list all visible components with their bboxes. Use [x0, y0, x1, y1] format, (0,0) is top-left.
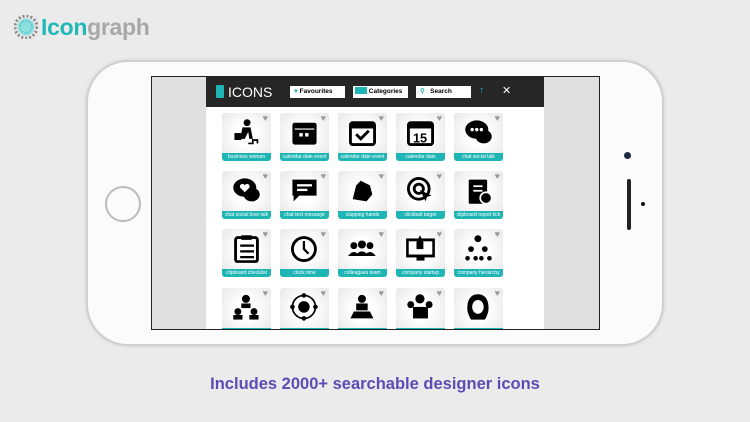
- row 1: [222, 113, 271, 161]
- search box: ⚲ Search: [420, 88, 452, 95]
- logo text: Icongraph: [41, 14, 149, 40]
- icon grid: ♥: [321, 113, 326, 123]
- icon grid: company startup: [402, 270, 439, 276]
- close: ✕: [502, 85, 511, 97]
- row 4: ♥: [263, 288, 268, 298]
- home button: [105, 186, 141, 222]
- row 3: clipboard checklist: [226, 270, 267, 276]
- icon grid: chat social talk: [462, 154, 495, 160]
- caption: Includes 2000+ searchable designer icons: [210, 375, 540, 393]
- sensor: [641, 202, 645, 206]
- row 2: [222, 171, 271, 219]
- row 1: ♥: [263, 113, 268, 123]
- icon grid: ♥: [437, 171, 442, 181]
- icon grid: ♥: [437, 113, 442, 123]
- row 3: ♥: [263, 229, 268, 239]
- icon grid: ♥: [379, 171, 384, 181]
- icon grid: ♥: [495, 113, 500, 123]
- camera: [624, 152, 631, 159]
- icon: gear logo: [14, 15, 38, 39]
- icon grid: ♥: [321, 171, 326, 181]
- icon grid: clock time: [293, 270, 316, 276]
- icon grid: ♥: [379, 229, 384, 239]
- search box: [416, 86, 471, 98]
- icon grid: clapping hands: [346, 212, 379, 218]
- categories button: Categories: [369, 88, 402, 95]
- icon grid: ♥: [437, 229, 442, 239]
- row 2: chat social love talk: [225, 212, 268, 218]
- phone: [86, 60, 664, 346]
- icon grid: ♥: [379, 113, 384, 123]
- icon grid: ♥: [495, 229, 500, 239]
- row 1: business woman: [228, 154, 265, 160]
- app title: ICONS: [228, 84, 272, 100]
- icon grid: ♥: [321, 229, 326, 239]
- icon grid: chat text message: [284, 212, 325, 218]
- arrow up: ↑: [479, 85, 484, 96]
- row 3: [222, 229, 271, 277]
- row 2: ♥: [263, 171, 268, 181]
- favourites button: [290, 86, 345, 98]
- icon grid: ♥: [495, 288, 500, 298]
- icon grid: ♥: [495, 171, 500, 181]
- icon grid: ♥: [379, 288, 384, 298]
- icon grid: ♥: [437, 288, 442, 298]
- icon grid: 15: [413, 131, 427, 145]
- icon grid: clickbait target: [405, 212, 436, 218]
- icon grid: calendar date: [405, 154, 436, 160]
- speaker: [627, 179, 631, 230]
- app header: [206, 77, 544, 107]
- icon grid: ♥: [321, 288, 326, 298]
- icon grid: clipboard report tick: [457, 212, 500, 218]
- icon grid: calendar date event: [283, 154, 326, 160]
- categories button: [353, 86, 408, 98]
- logo: [14, 14, 149, 40]
- icon grid: calendar date event: [341, 154, 384, 160]
- icon grid: [206, 107, 544, 331]
- icon grid: colleagues team: [344, 270, 381, 276]
- screen: [151, 76, 600, 330]
- favourites button: ♥ Favourites: [294, 88, 333, 95]
- icon: book: [216, 85, 224, 98]
- row 4: [222, 288, 271, 336]
- icon grid: company hierarchy: [457, 270, 500, 276]
